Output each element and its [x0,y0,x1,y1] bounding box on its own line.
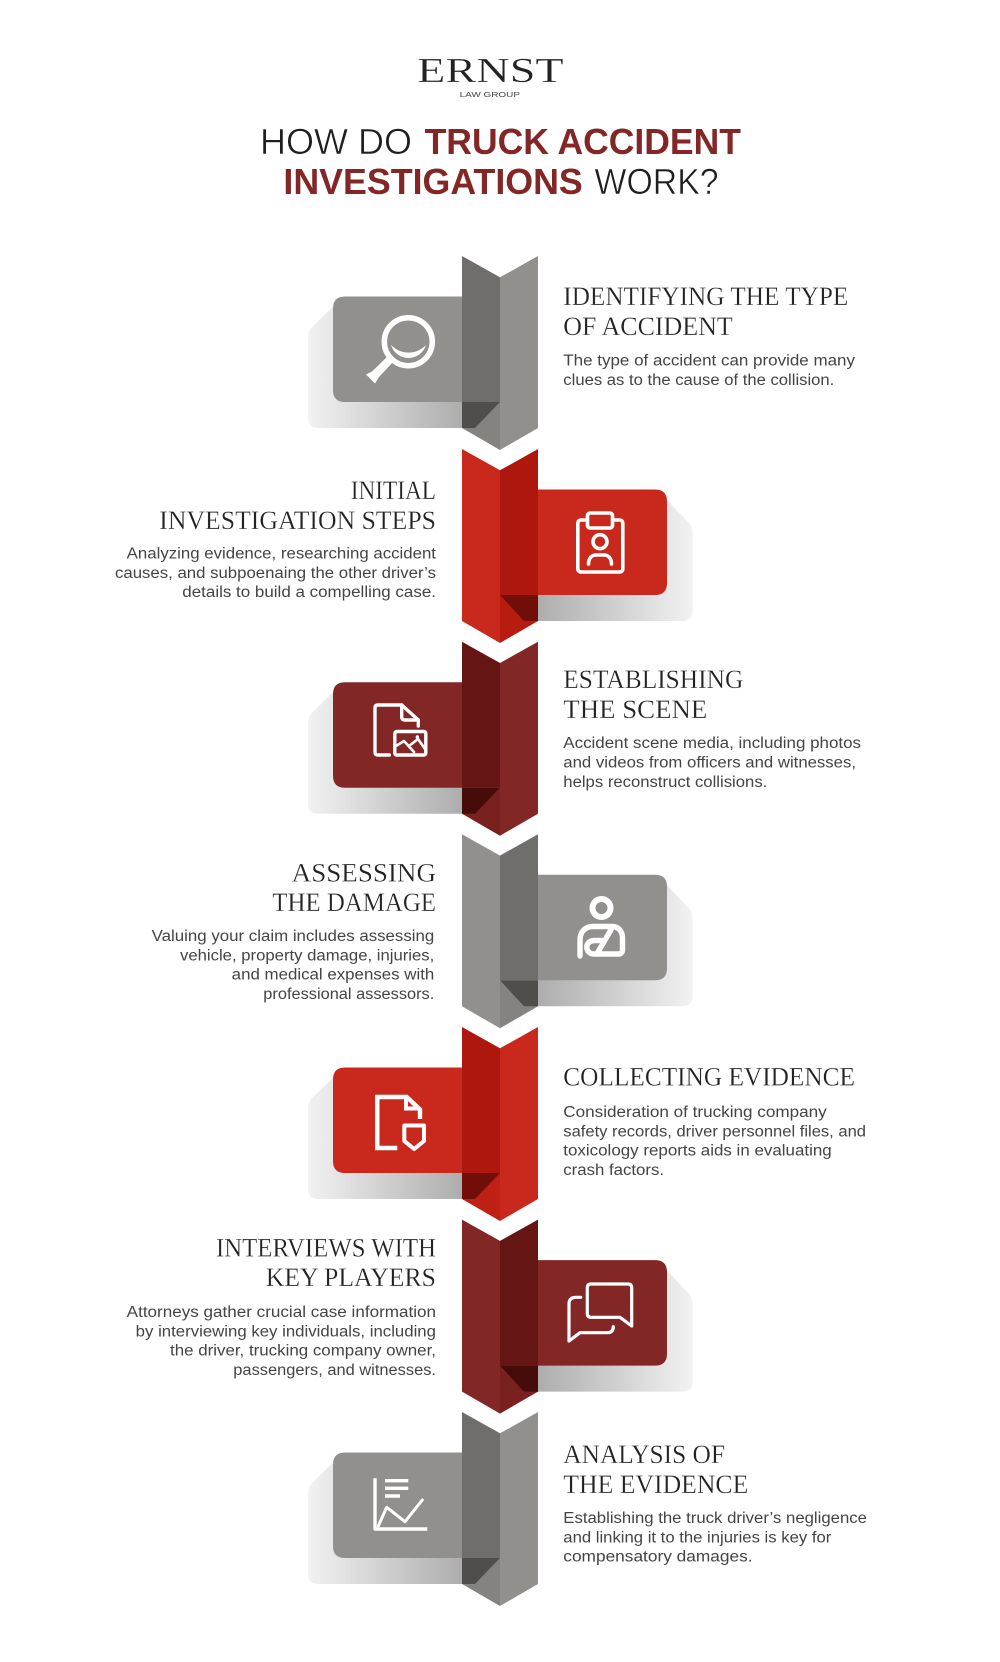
title: HOW DO [260,121,412,162]
description: vehicle, property damage, injuries, [180,947,434,964]
panel: step 7 graphic (gray, left) [308,1412,538,1606]
description: Valuing your claim includes assessing [152,928,434,945]
icon card [333,296,462,402]
icon card [538,875,667,980]
heading: IDENTIFYING THE TYPE [563,282,848,311]
logo: Ernst Law Group [417,51,564,99]
description: professional assessors. [263,986,434,1003]
folded column segment [462,1412,538,1606]
logo: Ernst Law Group: LAW GROUP [460,92,520,99]
heading: INTERVIEWS WITH [216,1234,436,1262]
panel: step 4 graphic (gray, right) [462,834,692,1028]
heading [563,665,743,724]
icon: file with shield [377,1097,424,1149]
description: crash factors. [563,1162,664,1179]
icon card [333,1068,462,1173]
folded column segment [462,256,538,450]
description [563,1510,867,1566]
text block: step 3 [563,665,861,791]
heading: THE DAMAGE [272,888,436,917]
panel: step 3 graphic (maroon, left) [308,642,538,836]
description: Consideration of trucking company [563,1104,827,1121]
heading: COLLECTING EVIDENCE [563,1063,855,1092]
text block: step 5 [563,1063,866,1179]
card shadow [538,494,692,621]
description: helps reconstruct collisions. [563,774,767,791]
card shadow [538,879,692,1006]
heading [159,476,436,535]
heading: INVESTIGATION STEPS [159,506,436,535]
description: clues as to the cause of the collision. [563,372,834,389]
heading [563,1440,748,1499]
folded column segment [462,642,538,836]
icon: speech bubbles [569,1284,632,1341]
description: Accident scene media, including photos [563,735,861,752]
panel: step 5 graphic (red, left) [308,1027,538,1221]
description [563,1104,866,1179]
heading: THE SCENE [563,695,707,724]
description: Attorneys gather crucial case information [127,1304,436,1321]
heading [563,282,848,341]
description: Establishing the truck driver’s negligence [563,1510,867,1527]
heading: ESTABLISHING [563,665,743,694]
card shadow [308,1072,462,1199]
heading: THE EVIDENCE [563,1470,748,1499]
folded column segment [462,449,538,643]
description [563,353,855,389]
description [115,546,437,601]
icon: line chart [375,1478,427,1529]
icon: file with image [375,705,426,755]
description: causes, and subpoenaing the other driver’s [115,565,436,582]
icon: magnifying glass [366,318,432,384]
description: by interviewing key individuals, including [136,1323,436,1340]
logo: Ernst Law Group: ERNST [417,51,564,90]
folded column segment [462,1027,538,1221]
card shadow [538,1265,692,1392]
heading [216,1234,436,1292]
description: compensatory damages. [563,1549,753,1566]
title: TRUCK ACCIDENT [425,121,741,162]
panel: step 6 graphic (maroon, right) [462,1220,692,1414]
icon card [333,682,462,788]
description: toxicology reports aids in evaluating [563,1143,832,1160]
heading: OF ACCIDENT [563,312,733,341]
panel: step 2 graphic (red, right) [462,449,692,643]
description: Analyzing evidence, researching accident [127,546,437,562]
description: passengers, and witnesses. [233,1362,436,1379]
title: WORK? [594,161,719,202]
heading [272,859,436,917]
text block: step 4 [152,859,436,1003]
panel: step 1 graphic (gray, left) [308,256,538,450]
description [152,928,434,1003]
description: and medical expenses with [232,967,434,984]
description: and linking it to the injuries is key for [563,1529,831,1546]
heading: INITIAL [351,476,436,505]
card shadow [308,301,462,428]
description [563,735,861,791]
icon card [538,1260,667,1366]
description: details to build a compelling case. [182,584,436,601]
description: safety records, driver personnel files, and [563,1123,866,1140]
text block: step 1 [563,282,855,389]
description: The type of accident can provide many [563,353,855,370]
description [127,1304,436,1379]
title: INVESTIGATIONS [283,161,583,202]
folded column segment [462,1220,538,1414]
folded column segment [462,834,538,1028]
card shadow [308,687,462,814]
text block: step 7 [563,1440,867,1566]
heading: ASSESSING [292,859,436,888]
heading: ANALYSIS OF [563,1440,725,1469]
icon card [333,1452,462,1558]
description: the driver, trucking company owner, [170,1343,436,1360]
text block: step 6 [127,1234,436,1379]
card shadow [308,1457,462,1584]
heading: KEY PLAYERS [266,1263,436,1292]
text block: step 2 [115,476,437,601]
icon: clipboard with person [578,513,623,572]
icon: person with arm sling [580,899,622,956]
icon card [538,490,667,595]
description: and videos from officers and witnesses, [563,754,856,772]
title [260,121,741,202]
